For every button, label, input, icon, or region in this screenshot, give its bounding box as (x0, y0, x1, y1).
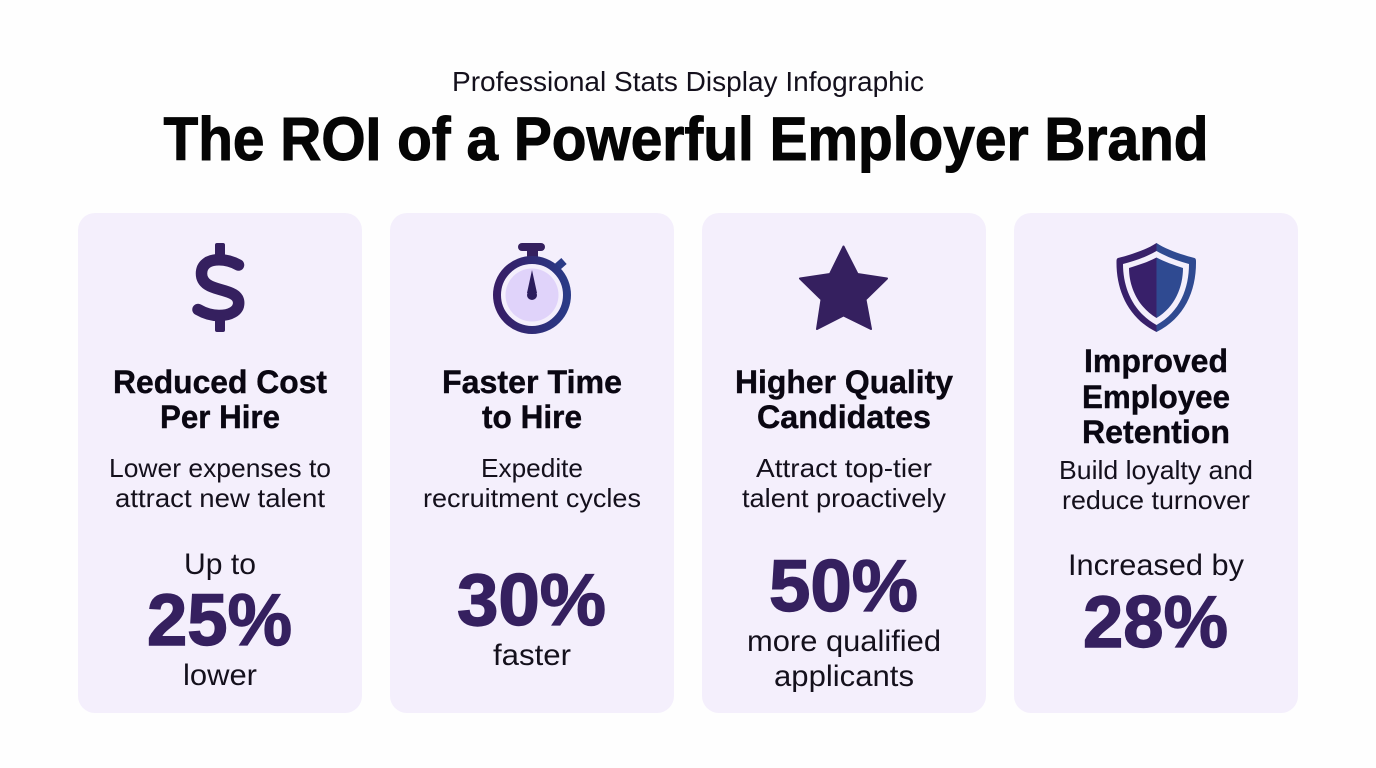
description: reduce turnover (1062, 485, 1250, 515)
heading: Improved (1084, 343, 1228, 379)
stat: increased by 28%: 28% (1083, 582, 1228, 663)
heading: Higher Quality (735, 364, 953, 400)
panel: faster time to hire (390, 213, 674, 713)
heading (735, 364, 953, 435)
stat: 50% more qualified applicants: more qualified (747, 625, 941, 658)
description (1059, 455, 1253, 515)
description (742, 453, 946, 513)
description: Expedite (481, 453, 583, 483)
stat: 50% more qualified applicants: applicants (774, 660, 914, 693)
description: talent proactively (742, 483, 946, 513)
stat: increased by 28%: Increased by (1068, 549, 1244, 582)
heading: Employee (1082, 379, 1230, 415)
icon: stopwatch (497, 243, 567, 330)
icon: star (800, 246, 887, 329)
icon: shield (1116, 243, 1196, 332)
subtitle: Professional Stats Display Infographic (452, 66, 924, 97)
stat: increased by 28% (1068, 549, 1244, 663)
description: attract new talent (115, 483, 326, 513)
heading (1082, 343, 1230, 450)
heading: Reduced Cost (113, 364, 327, 400)
stat: 50% more qualified applicants: 50% (769, 546, 918, 627)
panel: higher quality candidates (702, 213, 986, 713)
stat: 30% faster: faster (493, 639, 571, 672)
description (109, 453, 331, 513)
stat: 50% more qualified applicants (747, 546, 941, 693)
stat: up to 25% lower: 25% (147, 580, 292, 661)
description: Attract top-tier (756, 453, 932, 483)
panel: improved employee retention (1014, 213, 1298, 713)
stat: up to 25% lower (147, 548, 292, 692)
description (423, 453, 641, 513)
heading (442, 364, 622, 435)
header (164, 66, 1208, 173)
heading: Per Hire (160, 399, 280, 435)
heading: Faster Time (442, 364, 622, 400)
heading: Retention (1082, 414, 1230, 450)
description: Build loyalty and (1059, 455, 1253, 485)
heading: Candidates (757, 399, 931, 435)
stat: up to 25% lower: lower (183, 659, 257, 692)
stat: 30% faster: 30% (457, 560, 606, 641)
heading: to Hire (482, 399, 582, 435)
title: The ROI of a Powerful Employer Brand (164, 105, 1208, 173)
description: recruitment cycles (423, 483, 641, 513)
panel: reduced cost per hire (78, 213, 362, 713)
stat: up to 25% lower: Up to (184, 548, 256, 581)
description: Lower expenses to (109, 453, 331, 483)
heading (113, 364, 327, 435)
icon: dollar sign (198, 243, 239, 332)
